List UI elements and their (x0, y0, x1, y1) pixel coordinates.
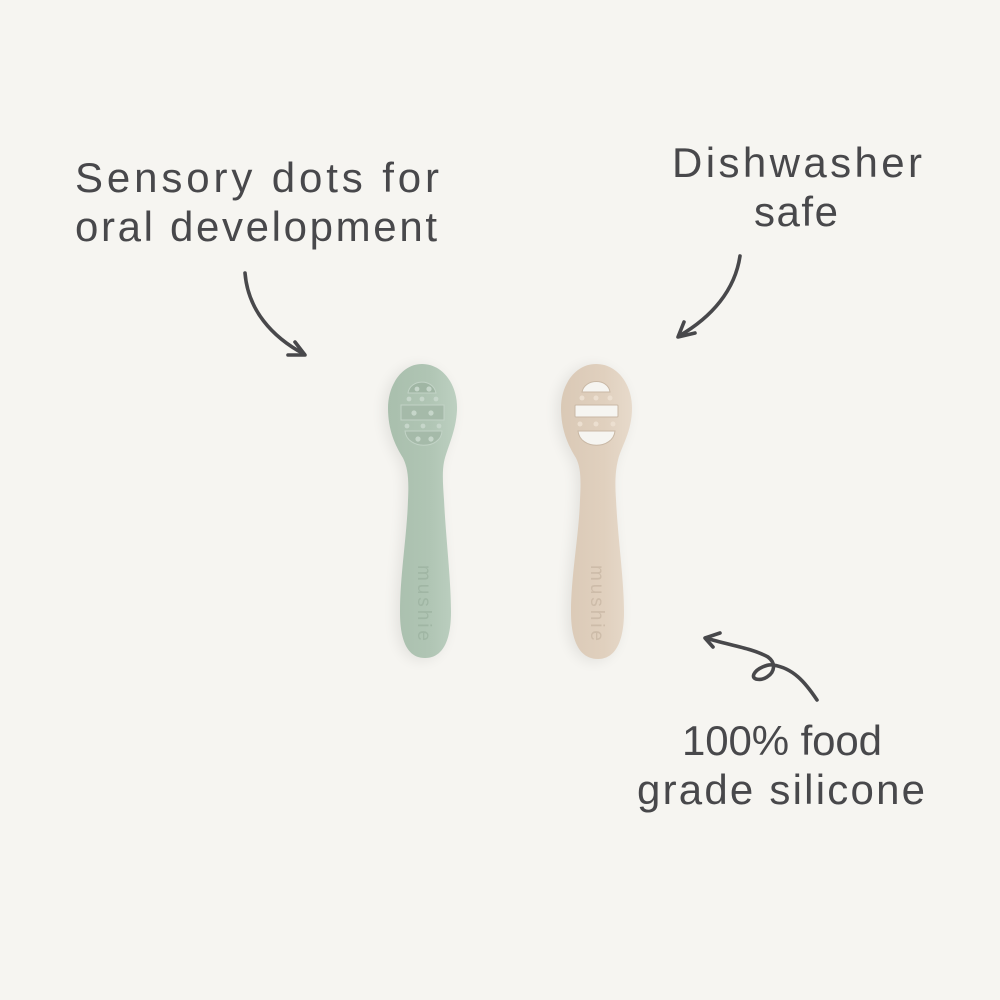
caption: dishwasher safe: safe (754, 188, 838, 235)
arrow: sensory dots to green spoon (245, 273, 305, 355)
green spoon (384, 364, 457, 660)
caption: sensory dots (75, 154, 439, 250)
caption: sensory dots: oral development (75, 203, 437, 250)
caption: dishwasher safe (672, 139, 922, 235)
caption: food grade silicone: 100% food (682, 717, 882, 764)
embossed logo: mushie (413, 565, 434, 641)
caption: dishwasher safe: Dishwasher (672, 139, 922, 186)
caption: food grade silicone (637, 717, 925, 813)
sensory dot panels (401, 382, 444, 445)
beige spoon (557, 364, 632, 661)
caption: sensory dots: Sensory dots for (75, 154, 439, 201)
arrow: food grade silicone (705, 633, 817, 700)
caption: food grade silicone: grade silicone (637, 766, 925, 813)
cut-out slots and dots (575, 382, 618, 445)
embossed logo: mushie (586, 565, 607, 641)
arrow: dishwasher safe to beige spoon (678, 256, 740, 337)
